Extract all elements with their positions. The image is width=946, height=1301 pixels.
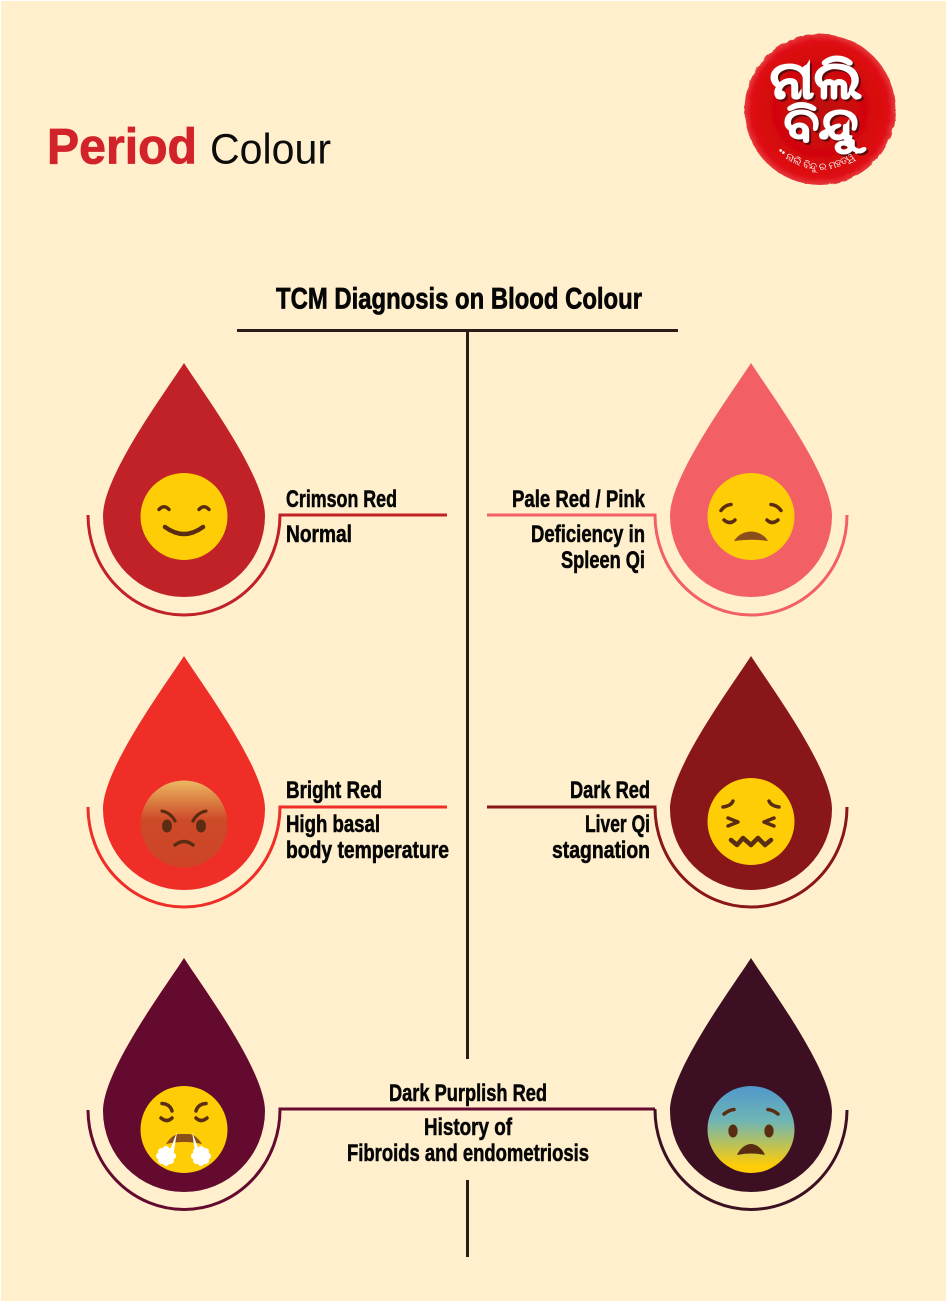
heading rule and central divider: [237, 329, 678, 1257]
heading: TCM Diagnosis on Blood Colour: TCM Diagnosis on Blood Colour: [276, 282, 642, 316]
label: History of Fibroids and endometriosis: [347, 1114, 589, 1167]
panel: bright red: [88, 656, 449, 907]
label: Liver Qi stagnation: stagnation: [552, 837, 650, 864]
emoji: sad: [708, 473, 794, 560]
connector: purple, left arc and shared line: [88, 1109, 655, 1209]
logo: Nali Bindu badge: [744, 34, 896, 185]
panel: dark purplish red: [88, 958, 655, 1209]
drop: dark red: [670, 656, 832, 890]
label: Normal: Normal: [286, 521, 352, 548]
label: High basal body temperature: High basal: [286, 811, 380, 838]
label: History of Fibroids and endometriosis: Fibroids and endometriosis: [347, 1140, 589, 1167]
connector: crimson: [88, 515, 447, 615]
label: High basal body temperature: body temperature: [286, 837, 449, 864]
emoji: confounded: [708, 778, 794, 865]
logo: Nali Bindu badge: ନାଲି: [772, 54, 864, 112]
connector: dark red: [487, 807, 847, 907]
label: History of Fibroids and endometriosis: History of: [424, 1114, 513, 1141]
label: Liver Qi stagnation: [552, 811, 650, 864]
title: [47, 118, 331, 174]
connector: pink: [487, 515, 847, 615]
panel: darkest drop: [655, 958, 847, 1209]
drop: crimson: [103, 363, 265, 597]
label: Deficiency in Spleen Qi: Spleen Qi: [561, 547, 645, 574]
emoji: angry: [140, 780, 228, 868]
panel: dark red: [487, 656, 847, 907]
logo: Nali Bindu badge: ବିନ୍ଦୁ: [786, 100, 868, 156]
drop: bright red: [103, 656, 265, 890]
label: High basal body temperature: [286, 811, 449, 864]
logo: Nali Bindu badge: ବିନ୍ଦୁ: [784, 98, 866, 154]
connector: near black purple: [655, 1109, 847, 1209]
drop: pink: [670, 363, 832, 597]
label: Liver Qi stagnation: Liver Qi: [585, 811, 650, 838]
panel: crimson red: [88, 363, 447, 615]
logo: Nali Bindu badge: ନାଲି: [770, 52, 862, 110]
label: Bright Red: Bright Red: [286, 777, 382, 804]
emoji: smiling: [140, 473, 228, 560]
title: Period: [47, 118, 197, 174]
label: Pale Red / Pink: Pale Red / Pink: [512, 486, 645, 513]
drop: purple: [103, 958, 265, 1192]
label: Deficiency in Spleen Qi: Deficiency in: [531, 521, 645, 548]
logo: Nali Bindu badge: •• ନାଲି ବିନ୍ଦୁ ର ମହତ୍ୱ ••: [779, 149, 858, 173]
connector: bright red: [88, 807, 447, 907]
label: Dark Red: Dark Red: [570, 777, 650, 804]
title: Colour: [210, 126, 331, 174]
label: Crimson Red: Crimson Red: [286, 486, 397, 513]
emoji: fearful: [708, 1086, 794, 1173]
emoji: steaming: [140, 1086, 228, 1173]
drop: near black purple: [670, 958, 832, 1192]
label: Dark Purplish Red: Dark Purplish Red: [389, 1080, 547, 1107]
panel: pale red / pink: [487, 363, 847, 615]
label: Deficiency in Spleen Qi: [531, 521, 645, 574]
